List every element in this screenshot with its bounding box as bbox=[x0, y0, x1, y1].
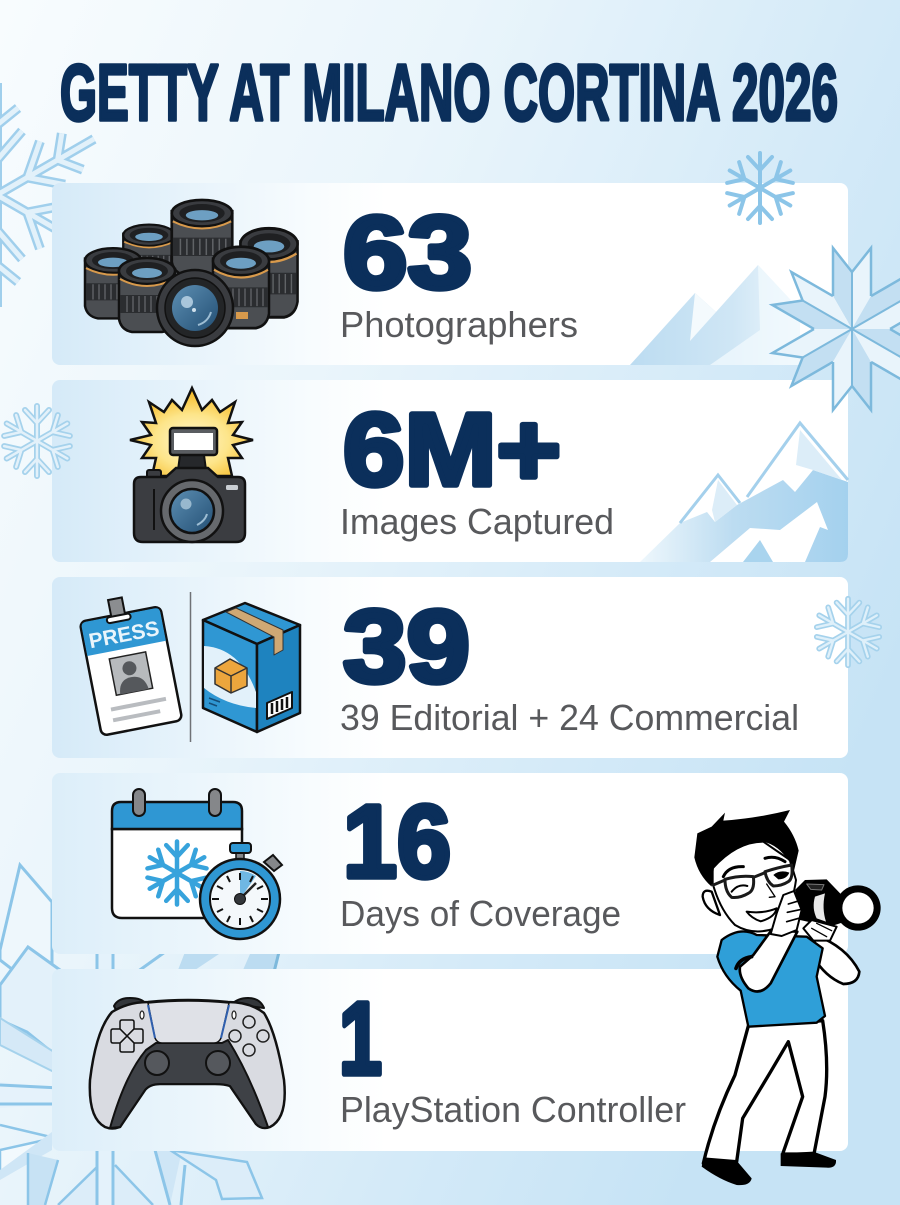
big number: 39 bbox=[343, 589, 470, 704]
character: photographer bbox=[694, 810, 881, 1185]
label: Photographers bbox=[340, 304, 578, 345]
panel: playstation controller bbox=[52, 969, 848, 1151]
card background bbox=[52, 577, 848, 758]
snowflake: bottom left bbox=[0, 865, 279, 1205]
shirt bbox=[717, 931, 825, 1027]
mountains bbox=[640, 423, 848, 562]
card background bbox=[52, 183, 848, 365]
nose bbox=[767, 884, 775, 897]
eyebrows bbox=[723, 857, 785, 877]
icon: camera with flash bbox=[130, 388, 253, 542]
icon: press badge bbox=[77, 591, 182, 736]
snowflake: right small bbox=[814, 599, 882, 665]
back arm bbox=[813, 935, 859, 984]
big number: 16 bbox=[343, 784, 451, 899]
glasses bbox=[713, 865, 792, 897]
panel: photographers bbox=[52, 183, 848, 365]
big number: 1 bbox=[339, 981, 382, 1096]
shoes bbox=[702, 1152, 836, 1185]
label: PlayStation Controller bbox=[340, 1089, 686, 1130]
snowflake: top right small bbox=[724, 153, 796, 223]
smile bbox=[747, 908, 777, 921]
snowflake: right large bbox=[772, 248, 900, 410]
card background bbox=[52, 773, 848, 954]
icon: commercial box bbox=[203, 603, 300, 732]
card background bbox=[52, 969, 848, 1151]
hands bbox=[771, 891, 802, 936]
icon: camera lenses bbox=[85, 200, 298, 346]
wink bbox=[732, 885, 747, 892]
front arm bbox=[740, 930, 797, 992]
card background bbox=[52, 380, 848, 562]
camera bbox=[795, 879, 881, 931]
divider bbox=[190, 592, 192, 742]
panel: days of coverage bbox=[52, 773, 848, 954]
trousers bbox=[703, 1021, 827, 1163]
ear bbox=[703, 891, 720, 915]
eye bbox=[773, 871, 789, 879]
panel: images captured bbox=[52, 380, 848, 562]
label: 39 Editorial + 24 Commercial bbox=[340, 697, 799, 738]
icon: calendar and stopwatch bbox=[112, 789, 282, 939]
face bbox=[713, 842, 796, 931]
icon: game controller bbox=[90, 998, 285, 1128]
mountains bbox=[630, 265, 800, 365]
label: Images Captured bbox=[340, 501, 614, 542]
snowflake: top left bbox=[0, 83, 106, 307]
snowflake: left small bbox=[1, 406, 73, 476]
icon: press badge: PRESS bbox=[87, 617, 161, 653]
panel: editorial and commercial bbox=[52, 577, 848, 758]
big number: 63 bbox=[343, 195, 472, 310]
hair bbox=[694, 810, 799, 887]
big number: 6M+ bbox=[343, 392, 561, 507]
label: Days of Coverage bbox=[340, 893, 621, 934]
